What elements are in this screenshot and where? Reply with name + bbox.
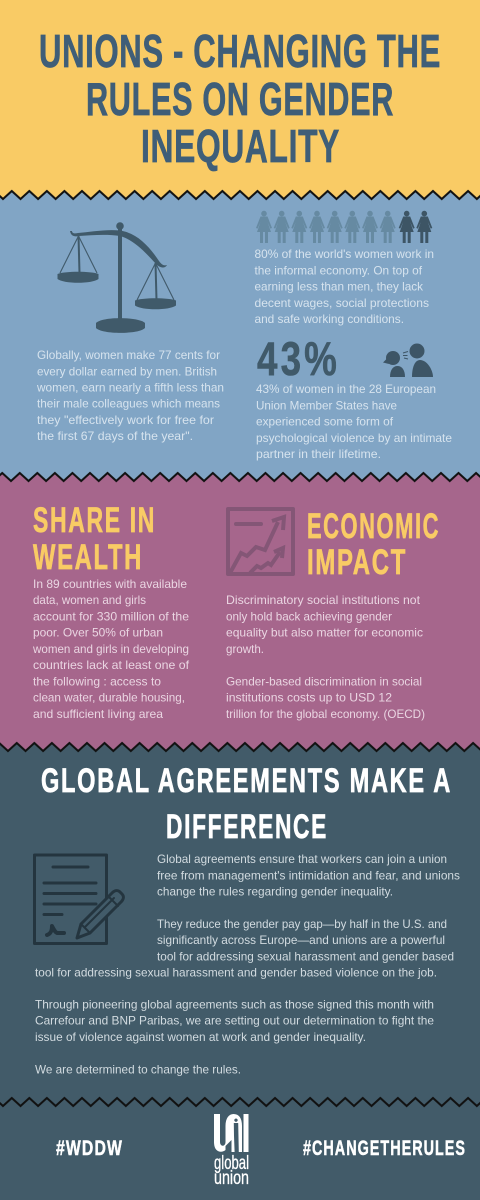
text: pay gap: their male colleagues which means	[37, 397, 220, 411]
text: global agreements intro: significantly across Europe—and unions are a powerful	[157, 933, 445, 947]
text: share in wealth: clean water, durable housing,	[33, 691, 185, 705]
icon: rising line chart	[228, 509, 293, 574]
text: pioneering agreements: Carrefour and BNP Paribas, we are setting out our determination to fight the	[35, 1014, 434, 1028]
text: pay gap: the first 67 days of the year".	[37, 429, 193, 443]
icon: signed document and pen	[34, 855, 123, 944]
text: economic impact: Gender-based discrimination in social	[226, 674, 422, 688]
text: psychological violence: psychological violence by an intimate	[256, 431, 452, 445]
text: informal economy: decent wages, social protections	[254, 296, 429, 310]
divider: blue to purple	[0, 469, 480, 485]
text: global agreements intro: change the rules regarding gender inequality.	[157, 884, 393, 898]
text: economic impact: growth.	[226, 642, 264, 656]
text: global agreements intro: tool for addressing sexual harassment and gender based violence on the job.	[35, 966, 437, 980]
text: pioneering agreements: We are determined to change the rules.	[35, 1062, 241, 1076]
text: global agreements intro: tool for addressing sexual harassment and gender based	[157, 950, 454, 964]
text: global agreements intro: Global agreements ensure that workers can join a union	[157, 852, 447, 866]
text: economic impact: Discriminatory social institutions not	[226, 593, 421, 607]
heading: share in wealth	[33, 501, 156, 577]
text: pay gap: women, earn nearly a fifth less than	[36, 380, 224, 394]
divider: title to blue	[0, 187, 480, 203]
text: share in wealth: In 89 countries with available	[33, 577, 187, 591]
text: informal economy: earning less than men, they lack	[254, 280, 424, 294]
icon: balance scales	[58, 222, 176, 333]
text: share in wealth: the following : access to	[33, 674, 161, 688]
heading: share in wealth: WEALTH	[33, 538, 143, 577]
text: global agreements intro: free from management's intimidation and fear, and unions	[157, 868, 460, 882]
panel: wealth and economic impact	[0, 476, 480, 746]
text: psychological violence	[256, 382, 452, 461]
text: informal economy: 80% of the world's women work in	[254, 247, 434, 261]
divider: dark to footer	[0, 1094, 480, 1110]
text: pay gap	[36, 348, 224, 443]
text: share in wealth: women and girls in developing	[32, 642, 189, 656]
text: pay gap: they "effectively work for free for	[37, 413, 214, 427]
text: pay gap: Globally, women make 77 cents for	[37, 348, 220, 362]
text: economic impact	[226, 593, 425, 721]
text: psychological violence: experienced some form of	[256, 414, 394, 428]
heading: global agreements: DIFFERENCE	[166, 808, 328, 846]
text: economic impact: equality but also matter for economic	[226, 626, 423, 640]
text: psychological violence: 43% of women in the 28 European	[256, 382, 436, 396]
text: informal economy: and safe working conditions.	[254, 312, 404, 326]
logo: UNI global union	[214, 1114, 249, 1189]
text: psychological violence: Union Member States have	[256, 398, 397, 412]
text: pay gap: every dollar earned by men. British	[37, 364, 217, 378]
panel: global agreements	[0, 746, 480, 1200]
text: share in wealth: countries lack at least one of	[33, 658, 190, 672]
logo: UNI global union: union	[214, 1168, 249, 1189]
text: economic impact: trillion for the global economy. (OECD)	[226, 707, 425, 721]
panel: footer	[56, 1114, 466, 1189]
text: informal economy: the informal economy. On top of	[254, 263, 423, 277]
text: global agreements intro: They reduce the gender pay gap—by half in the U.S. and	[157, 917, 447, 931]
title: INEQUALITY	[141, 120, 340, 172]
text: psychological violence: partner in their lifetime.	[256, 447, 381, 461]
title	[39, 25, 441, 172]
icon: two people talking	[383, 344, 433, 377]
panel: pay gap and violence statistics	[0, 190, 480, 476]
big number: 43%: 43%	[257, 332, 340, 385]
text: global agreements intro	[35, 852, 460, 980]
text: informal economy	[254, 247, 434, 326]
heading: share in wealth: SHARE IN	[33, 501, 156, 540]
panel: title banner	[0, 0, 480, 192]
icon: ten women pictogram	[256, 211, 432, 243]
text: share in wealth: account for 330 million of the	[33, 610, 189, 624]
text: share in wealth: and sufficient living area	[33, 707, 163, 721]
text: pioneering agreements: Through pioneering global agreements such as those signed this month with	[35, 998, 434, 1012]
text: pioneering agreements: issue of violence against women at work and gender inequality.	[35, 1030, 366, 1044]
logo: UNI global union: global	[214, 1153, 249, 1174]
text: economic impact: institutions costs up to USD 12	[226, 691, 392, 705]
heading: global agreements	[41, 762, 452, 846]
divider: purple to dark	[0, 739, 480, 755]
heading: economic impact	[307, 507, 440, 582]
text: share in wealth	[32, 577, 190, 721]
heading: economic impact: IMPACT	[307, 543, 407, 582]
text: pioneering agreements	[35, 998, 434, 1076]
text: share in wealth: poor. Over 50% of urban	[33, 626, 163, 640]
text: economic impact: only hold back achieving gender	[226, 609, 392, 623]
text: share in wealth: data, women and girls	[33, 593, 146, 607]
hashtag: wddw: #WDDW	[56, 1137, 123, 1160]
